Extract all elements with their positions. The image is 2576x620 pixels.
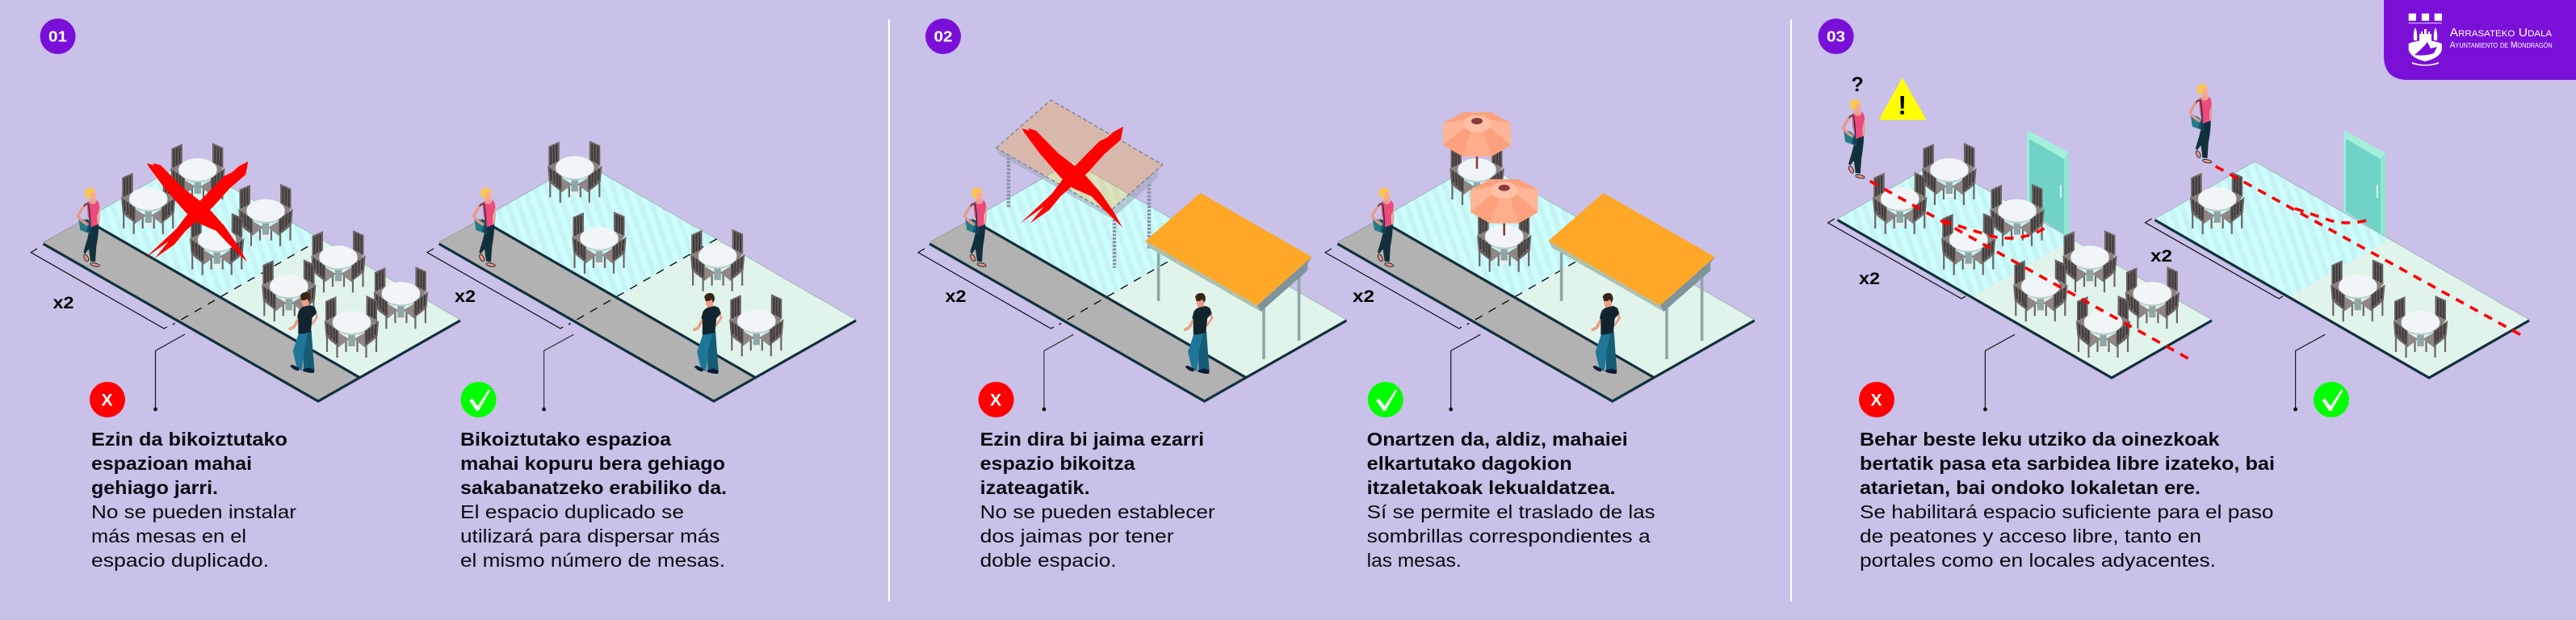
icon: warning triangle <box>1880 79 1925 119</box>
number badge 03 <box>1819 19 1854 54</box>
text block: passage and access: Se habilitará espacio suficiente para el paso <box>1860 501 2274 522</box>
question mark: ? <box>1851 73 1864 96</box>
scene: correct, free passage <box>2145 84 2529 378</box>
text block: passage and access: atarietan, bai ondoko lokaletan ere. <box>1860 477 2201 498</box>
scene: correct, same tables dispersed: x2 <box>455 287 476 306</box>
text block: correct tables: el mismo número de mesas. <box>460 550 725 571</box>
scene: incorrect, blocked passage <box>1828 73 2212 378</box>
number badge 02: 02 <box>933 27 953 45</box>
number badge 02 <box>925 19 961 54</box>
number badge 01: 01 <box>48 27 67 45</box>
text block: incorrect tables: espacio duplicado. <box>91 550 269 571</box>
scene: incorrect, two tents <box>918 100 1347 401</box>
divider between panels 2 and 3 <box>1790 19 1792 601</box>
text block: incorrect tents: No se pueden establecer <box>980 501 1215 522</box>
leader line to text <box>1983 334 2015 411</box>
scene: incorrect, two tents: x2 <box>945 287 966 306</box>
icon: warning triangle: ! <box>1898 90 1907 119</box>
red dashed walking route <box>1870 181 2195 362</box>
text block: passage and access: bertatik pasa eta sarbidea libre izateko, bai <box>1860 453 2275 474</box>
icon: green check badge <box>1368 382 1403 417</box>
scene: incorrect, extra tables: x2 <box>53 294 74 312</box>
scene: incorrect, extra tables <box>31 143 460 401</box>
text block: incorrect tents: Ezin dira bi jaima ezarri <box>980 429 1204 450</box>
text block: incorrect tables: espazioan mahai <box>91 453 252 474</box>
panel 02: tents and sunshades <box>918 19 1755 571</box>
icon: green check badge <box>461 382 497 417</box>
text block: correct sunshades <box>1367 429 1655 571</box>
icon: red cross badge <box>979 382 1014 417</box>
logo block: Arrasateko Udala: Arrasateko Udala <box>2450 26 2553 40</box>
scene: correct, sunshades over tables <box>1325 112 1755 401</box>
scene: correct, same tables dispersed <box>427 140 856 401</box>
icon: red cross badge: X <box>1870 391 1882 410</box>
text block: incorrect tables <box>91 429 296 571</box>
icon: green check badge <box>2314 382 2349 417</box>
panel 03: pedestrian passage and doorway access <box>1819 19 2529 571</box>
logo block: Arrasateko Udala: Ayuntamiento de Mondragón <box>2450 40 2553 50</box>
panel 01: duplicated space with tables <box>31 19 856 571</box>
leader line to text <box>542 334 573 411</box>
text block: correct sunshades: elkartutako dagokion <box>1367 453 1572 474</box>
logo block: Arrasateko Udala <box>2384 0 2576 80</box>
text block: correct tables: Bikoiztutako espazioa <box>460 429 672 450</box>
text block: incorrect tables: No se pueden instalar <box>91 501 296 522</box>
text block: correct sunshades: itzaletakoak lekualdatzea. <box>1367 477 1616 498</box>
scene: correct, sunshades over tables: x2 <box>1353 287 1374 306</box>
red dashed walking route <box>2216 166 2526 337</box>
icon: coat of arms <box>2409 14 2442 66</box>
text block: correct sunshades: sombrillas correspondientes a <box>1367 526 1651 547</box>
text block: passage and access: Behar beste leku utziko da oinezkoak <box>1860 429 2220 450</box>
icon: red cross badge <box>90 382 125 417</box>
icon: red cross badge: X <box>102 391 113 410</box>
scene: incorrect, blocked passage: x2 <box>2150 247 2172 266</box>
text block: correct tables <box>460 429 727 571</box>
text block: incorrect tents: izateagatik. <box>980 477 1090 498</box>
text block: correct tables: utilizará para dispersar más <box>460 526 720 547</box>
text block: incorrect tents: dos jaimas por tener <box>980 526 1174 547</box>
text block: incorrect tents <box>980 429 1215 571</box>
text block: correct sunshades: las mesas. <box>1367 550 1462 571</box>
text block: incorrect tables: gehiago jarri. <box>91 477 218 498</box>
leader line to text <box>2293 334 2325 411</box>
divider between panels 1 and 2 <box>888 19 890 601</box>
number badge 01 <box>40 19 76 54</box>
leader line to text <box>153 334 185 411</box>
leader line to text <box>1042 334 1073 411</box>
leader line to text <box>1449 334 1480 411</box>
text block: incorrect tables: más mesas en el <box>91 526 246 547</box>
text block: correct sunshades: Sí se permite el traslado de las <box>1367 501 1655 522</box>
text block: incorrect tents: doble espacio. <box>980 550 1117 571</box>
text block: correct tables: sakabanatzeko erabiliko da. <box>460 477 727 498</box>
ghost tent with dashed outline <box>996 100 1163 268</box>
text block: incorrect tables: Ezin da bikoiztutako <box>91 429 287 450</box>
scene: incorrect, blocked passage: x2 <box>1859 270 1880 288</box>
text block: passage and access: portales como en locales adyacentes. <box>1860 550 2216 571</box>
icon: red cross badge: X <box>990 391 1001 410</box>
text block: correct tables: El espacio duplicado se <box>460 501 684 522</box>
icon: red cross badge <box>1859 382 1894 417</box>
text block: correct sunshades: Onartzen da, aldiz, mahaiei <box>1367 429 1628 450</box>
number badge 03: 03 <box>1827 27 1845 45</box>
text block: passage and access <box>1860 429 2275 571</box>
text block: incorrect tents: espazio bikoitza <box>980 453 1136 474</box>
text block: passage and access: de peatones y acceso libre, tanto en <box>1860 526 2201 547</box>
text block: correct tables: mahai kopuru bera gehiago <box>460 453 725 474</box>
